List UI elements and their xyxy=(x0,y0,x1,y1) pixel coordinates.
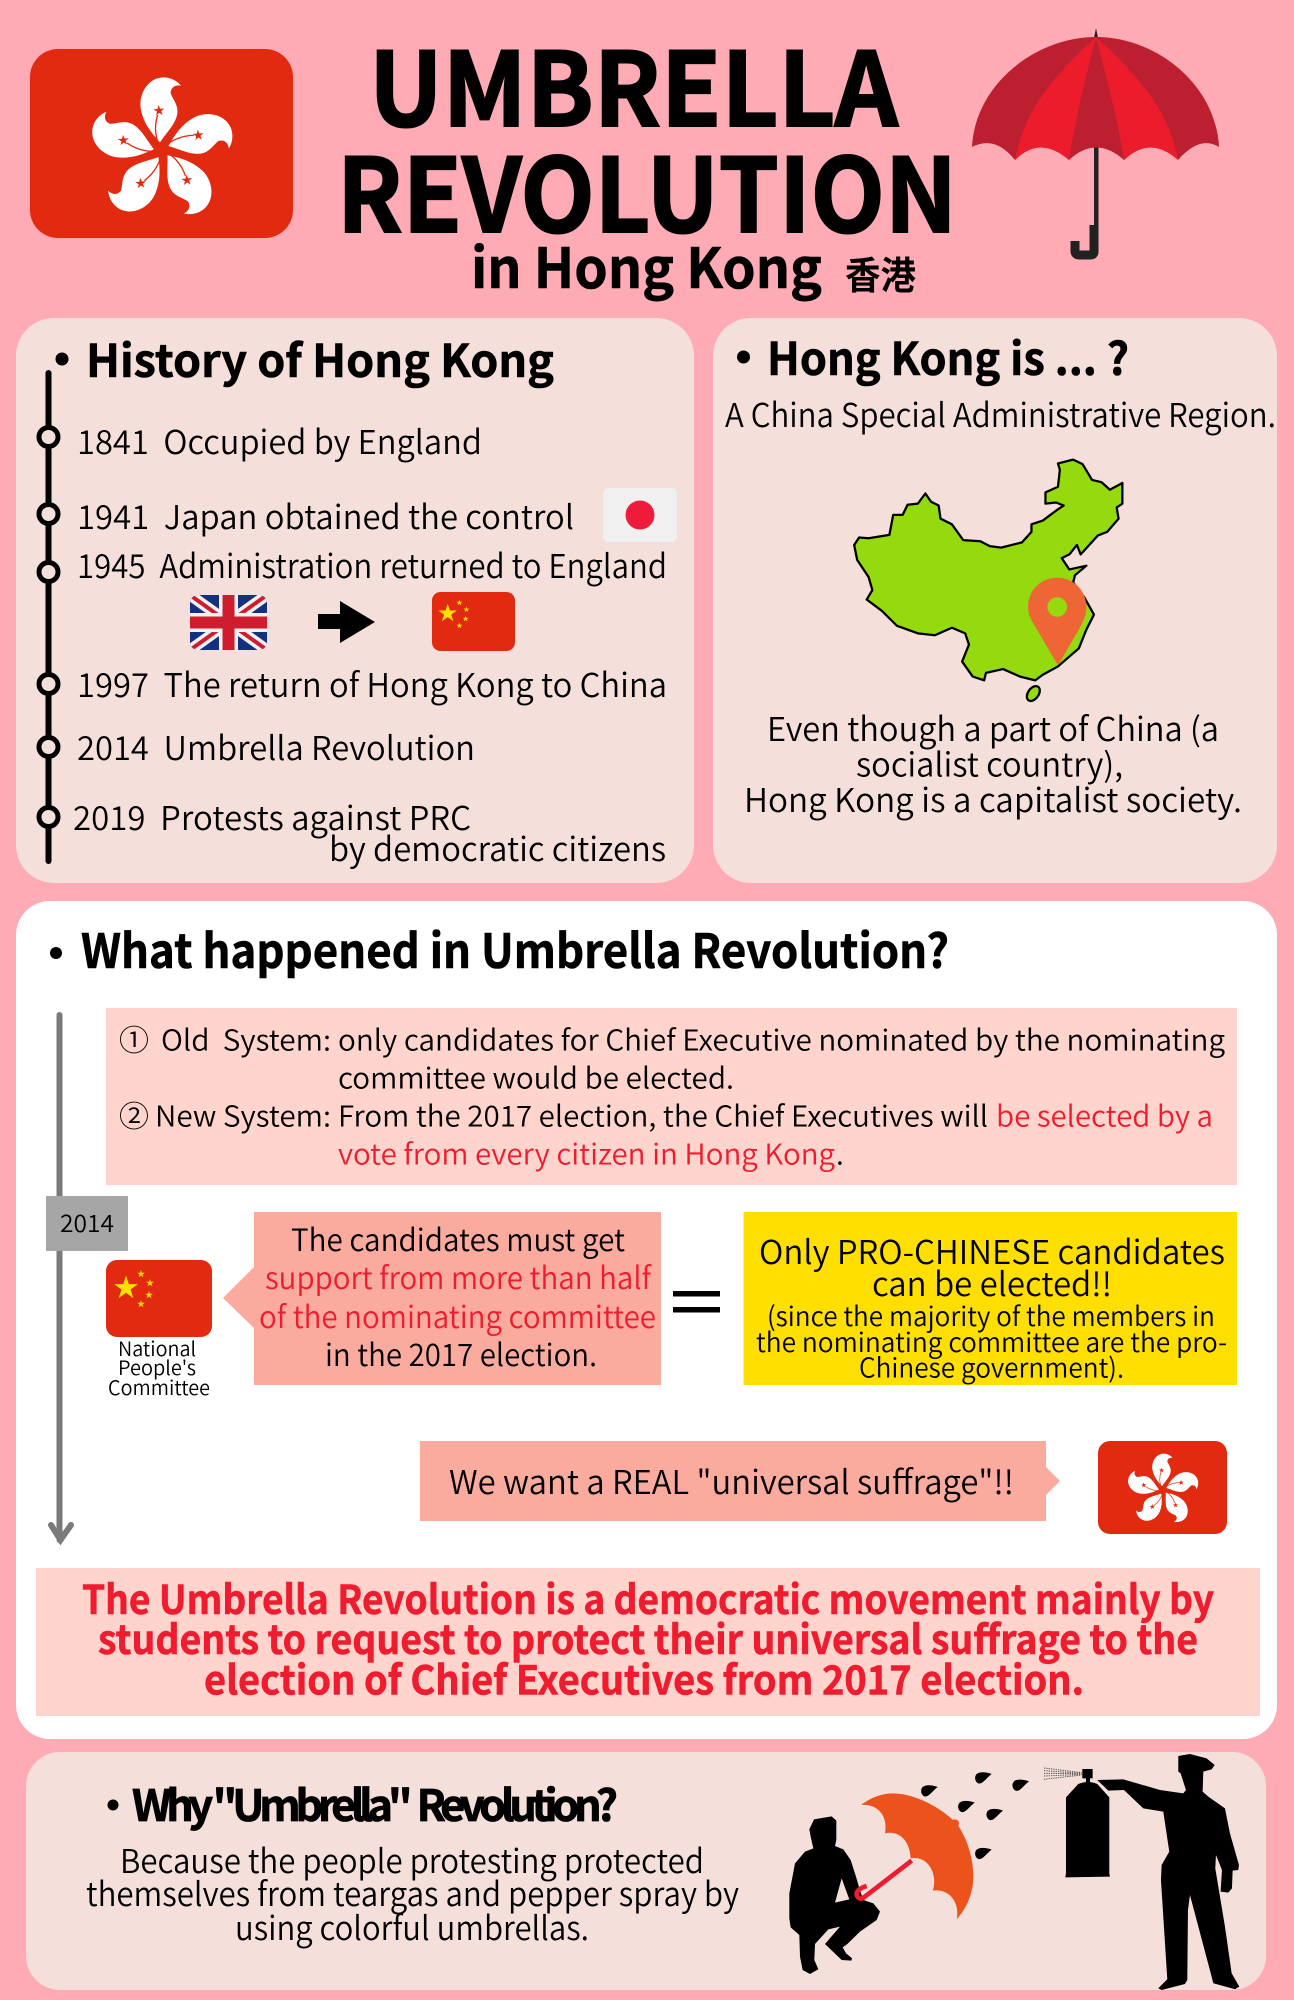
title: 香港 xyxy=(845,245,916,300)
heading: what happened: What happened in Umbrella Revolution? xyxy=(81,913,949,982)
timeline entries: 1841 Occupied by England xyxy=(77,416,482,464)
box: pro-Chinese candidates: Chinese government). xyxy=(859,1346,1124,1386)
box: old and new system: ② xyxy=(119,1094,149,1136)
timeline entries: 2019 Protests against PRC xyxy=(73,792,471,840)
vertical timeline arrow xyxy=(51,1015,71,1540)
callout: candidates xyxy=(223,1212,661,1385)
box: conclusion: students to request to protect their universal suffrage to the xyxy=(98,1608,1198,1666)
panel: what happened xyxy=(16,901,1277,1739)
icon: China flag, National People's Committee: National xyxy=(118,1333,196,1362)
title: REVOLUTION xyxy=(337,115,957,262)
text: capitalist society: Even though a part of China (a xyxy=(767,703,1219,751)
callout: candidates: support from more than half xyxy=(265,1253,652,1298)
icon: China flag xyxy=(432,592,515,651)
panel: Hong Kong is xyxy=(713,318,1277,883)
box: old and new system: New System: xyxy=(155,1094,331,1136)
box: old and new system: only candidates for Chief Executive nominated by the nominating xyxy=(338,1018,1225,1060)
box: conclusion xyxy=(36,1568,1260,1716)
icon: China flag, National People's Committee xyxy=(106,1260,212,1401)
arrow: UK to China xyxy=(318,601,375,643)
callout: candidates: of the nominating committee xyxy=(259,1292,656,1337)
icon: Hong Kong flag xyxy=(30,49,293,238)
illustration: protester with umbrella xyxy=(789,1793,973,1974)
title: in Hong Kong xyxy=(471,224,822,304)
text: capitalist society: socialist country), xyxy=(856,738,1123,786)
box: pro-Chinese candidates: (since the majority of the members in xyxy=(767,1295,1215,1334)
label: 2014 xyxy=(46,1196,128,1251)
icon: Japan flag xyxy=(603,488,677,542)
timeline entries: 2014 Umbrella Revolution xyxy=(77,722,475,770)
equals sign xyxy=(673,1291,720,1312)
heading: Hong Kong is: Hong Kong is ... ? xyxy=(767,323,1129,388)
timeline xyxy=(39,370,58,864)
icon: China flag, National People's Committee: People's xyxy=(118,1352,196,1381)
callout: candidates: in the 2017 election. xyxy=(325,1330,597,1375)
callout: real universal suffrage xyxy=(420,1441,1060,1521)
box: old and new system: Old System: xyxy=(161,1018,331,1060)
timeline entries: 1997 The return of Hong Kong to China xyxy=(77,659,667,707)
box: conclusion: The Umbrella Revolution is a democratic movement mainly by xyxy=(82,1568,1214,1626)
box: pro-Chinese candidates: the nominating committee are the pro- xyxy=(756,1321,1227,1360)
text: special administrative region: A China Special Administrative Region. xyxy=(725,389,1276,437)
box: conclusion: election of Chief Executives from 2017 election. xyxy=(204,1648,1084,1706)
box: old and new system xyxy=(106,1008,1237,1185)
icon: China flag, National People's Committee: Committee xyxy=(108,1372,210,1401)
timeline entries: 1945 Administration returned to England xyxy=(77,540,667,588)
callout: candidates: The candidates must get xyxy=(291,1215,626,1260)
text: why umbrella explanation: using colorful umbrellas. xyxy=(235,1902,589,1950)
box: old and new system: From the 2017 election, the Chief Executives will xyxy=(338,1094,988,1136)
timeline entries xyxy=(73,416,667,871)
box: pro-Chinese candidates: can be elected!! xyxy=(872,1258,1112,1306)
text: why umbrella explanation xyxy=(86,1835,739,1950)
map of China with pin xyxy=(854,460,1122,703)
box: pro-Chinese candidates xyxy=(744,1212,1237,1386)
timeline entries: by democratic citizens xyxy=(329,823,666,871)
box: old and new system: be selected by a xyxy=(996,1094,1213,1136)
callout: real universal suffrage: We want a REAL "universal suffrage"!! xyxy=(449,1456,1014,1504)
panel: history of Hong Kong xyxy=(16,318,694,883)
box: old and new system: vote from every citizen in Hong Kong xyxy=(338,1132,835,1174)
label: 2014: 2014 xyxy=(60,1204,114,1239)
icon: UK flag xyxy=(190,595,267,650)
text: capitalist society xyxy=(744,703,1242,822)
text: why umbrella explanation: Because the people protesting protected xyxy=(120,1835,704,1883)
box: pro-Chinese candidates: Only PRO-CHINESE candidates xyxy=(759,1226,1225,1274)
heading: history: History of Hong Kong xyxy=(86,325,554,390)
box: old and new system: . xyxy=(836,1132,844,1174)
illustration: pepper spray drops xyxy=(921,1772,1029,1859)
illustration: spray can xyxy=(1044,1768,1110,1877)
title: UMBRELLA xyxy=(369,9,899,156)
timeline entries: 1941 Japan obtained the control xyxy=(77,491,574,539)
text: why umbrella explanation: themselves from teargas and pepper spray by xyxy=(86,1868,739,1916)
title xyxy=(337,9,957,304)
box: old and new system: committee would be elected. xyxy=(338,1056,734,1098)
icon: small Hong Kong flag xyxy=(1098,1441,1227,1534)
illustration: police officer xyxy=(1097,1754,1239,1990)
box: old and new system: ① xyxy=(119,1018,149,1060)
text: capitalist society: Hong Kong is a capitalist society. xyxy=(744,774,1242,822)
icon: red umbrella xyxy=(972,28,1219,255)
heading: why umbrella: Why "Umbrella" Revolution? xyxy=(132,1772,618,1834)
panel: why umbrella xyxy=(26,1752,1266,1990)
